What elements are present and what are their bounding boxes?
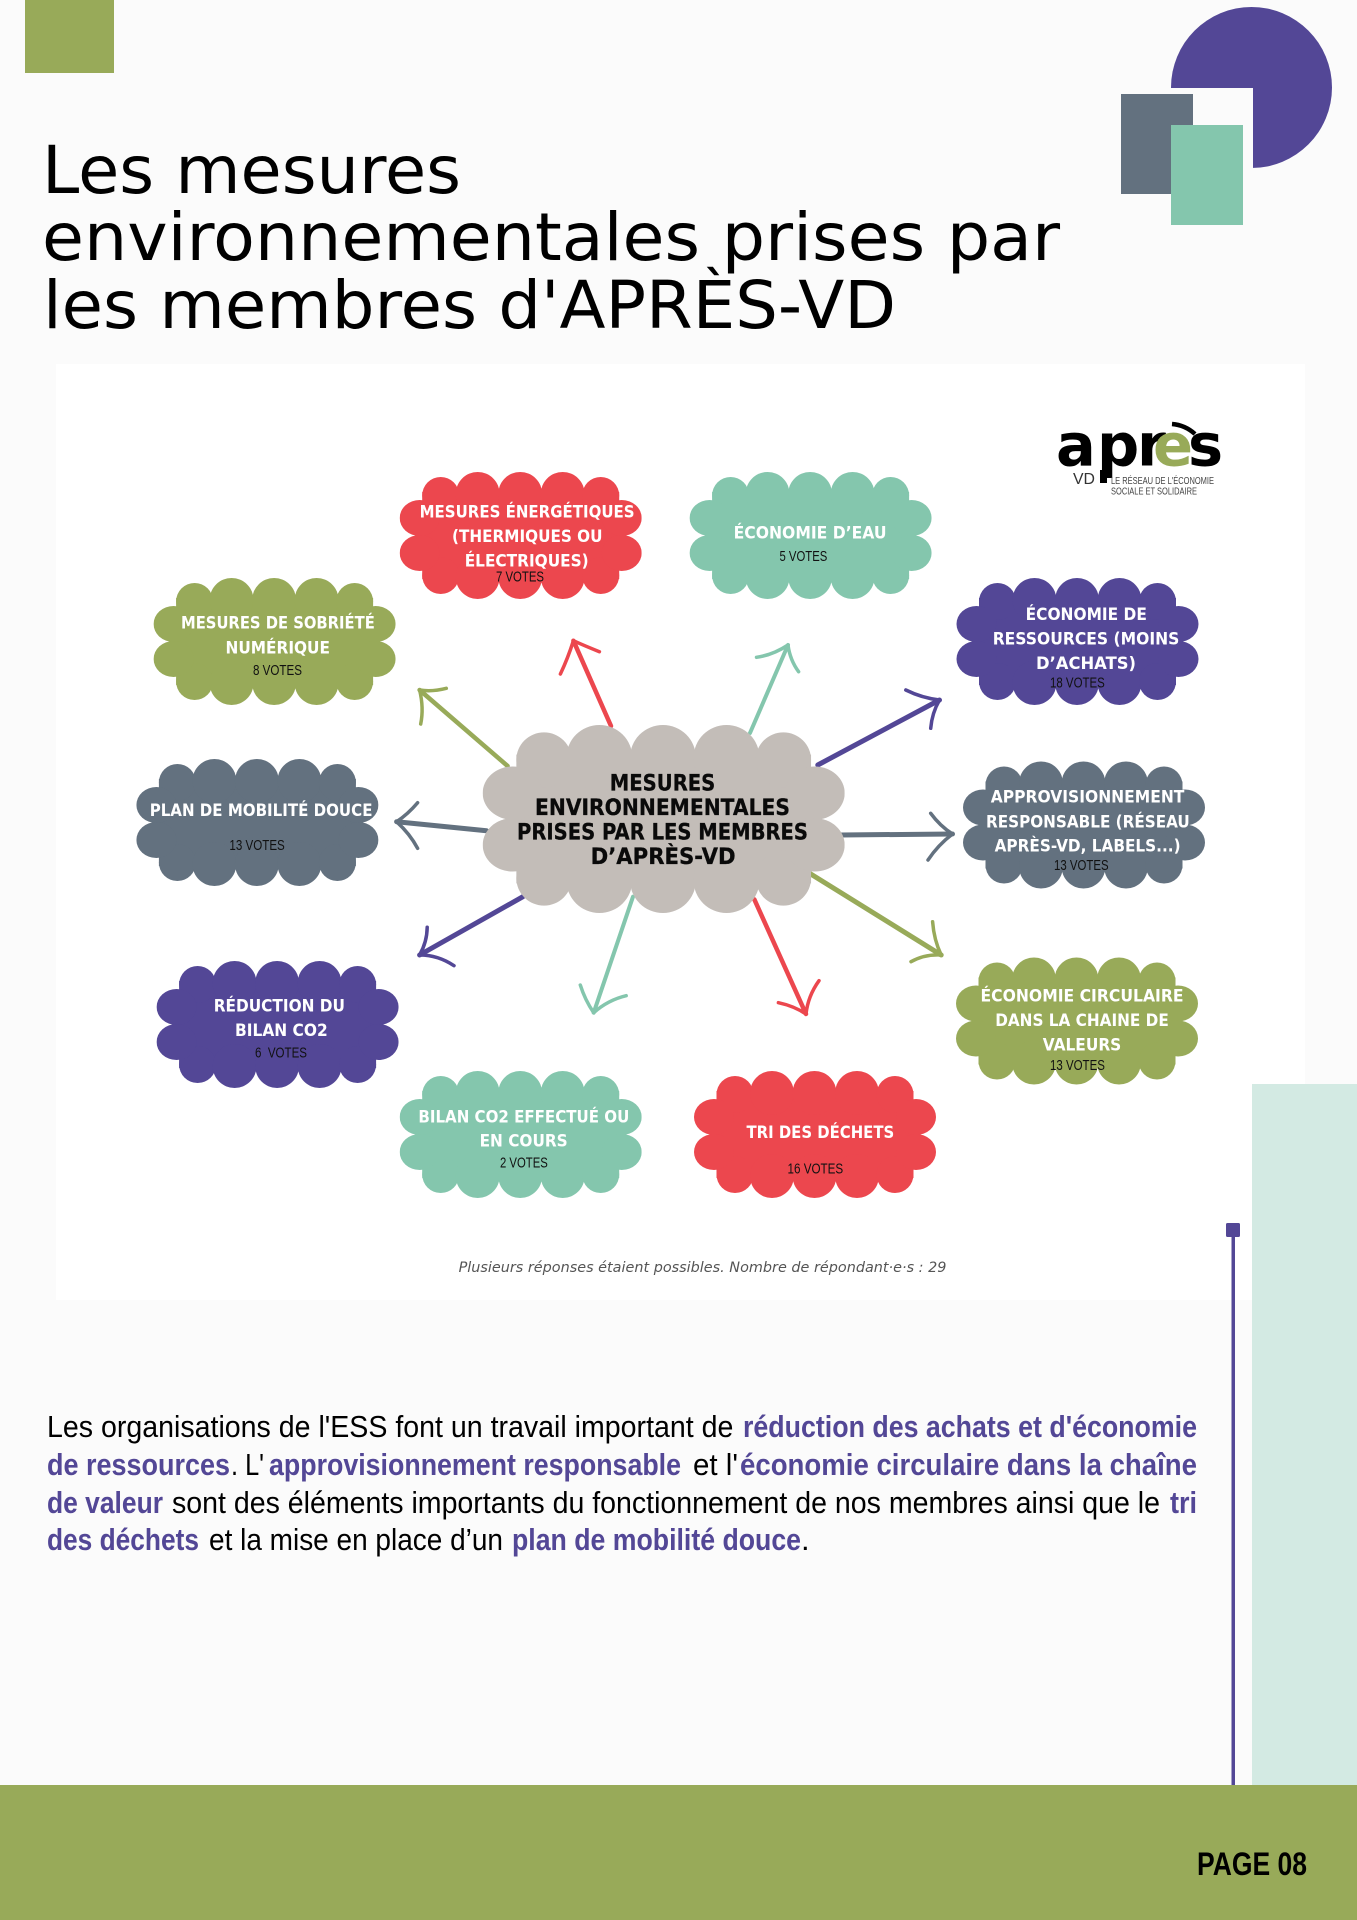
cloud: digital sobriety: MESURES DE SOBRIÉTÉ	[181, 614, 375, 633]
cloud: CO2 assessment: BILAN CO2 EFFECTUÉ OU	[418, 1107, 629, 1126]
cloud: resource saving: 18 VOTES	[1050, 675, 1105, 691]
body text: Les organisations de l'ESS font un travail important de	[47, 1409, 733, 1444]
logo: après-VD: SOCIALE ET SOLIDAIRE	[1111, 487, 1197, 498]
arrow: to soft mobility	[397, 803, 486, 848]
cloud: circular economy: VALEURS	[1043, 1035, 1121, 1054]
purple vertical line with square cap	[1226, 1223, 1240, 1785]
body text: plan de mobilité douce	[512, 1522, 801, 1557]
cloud: CO2 assessment	[400, 1071, 642, 1198]
title: environnementales prises par	[42, 199, 1061, 276]
body text: . L'	[231, 1447, 264, 1482]
central cloud: ENVIRONNEMENTALES	[535, 796, 790, 821]
cloud: responsible sourcing: APRÈS-VD, LABELS...)	[995, 837, 1181, 856]
arrow: to CO2 reduction	[420, 897, 523, 966]
body text: et la mise en place d’un	[209, 1522, 503, 1557]
body text: de ressources	[47, 1447, 230, 1482]
panel: mind map card	[56, 364, 1305, 1300]
cloud: digital sobriety: 8 VOTES	[253, 663, 302, 679]
card background	[56, 364, 1305, 1300]
cloud: digital sobriety	[154, 578, 396, 705]
arrow: to CO2 assessment	[580, 897, 633, 1013]
title	[42, 132, 1061, 344]
cloud: digital sobriety: NUMÉRIQUE	[226, 638, 330, 657]
cloud: resource saving: ÉCONOMIE DE	[1026, 605, 1147, 624]
cloud: energy measures: 7 VOTES	[496, 570, 544, 586]
decorative shapes top right	[1121, 7, 1332, 225]
cloud: CO2 reduction: 6 VOTES	[255, 1046, 307, 1062]
cloud: circular economy	[956, 958, 1198, 1084]
circle cutout	[1165, 88, 1253, 173]
cloud: waste sorting: TRI DES DÉCHETS	[746, 1123, 894, 1142]
cloud: water saving	[690, 472, 932, 599]
cloud: responsible sourcing: 13 VOTES	[1054, 858, 1109, 874]
decorative green square top left	[25, 0, 114, 73]
cloud: responsible sourcing	[963, 762, 1205, 888]
cloud: CO2 assessment: 2 VOTES	[500, 1155, 548, 1171]
page number: PAGE 08	[1197, 1846, 1307, 1882]
body text: de valeur	[47, 1485, 163, 1520]
body text: approvisionnement responsable	[269, 1447, 681, 1482]
central cloud: PRISES PAR LES MEMBRES	[517, 820, 808, 845]
arrow: to responsible sourcing	[841, 813, 952, 860]
cloud: CO2 reduction: BILAN CO2	[235, 1021, 328, 1040]
light green side strip	[1252, 1084, 1357, 1785]
logo: après-VD: VD	[1073, 471, 1095, 488]
slate rectangle	[1121, 94, 1193, 194]
cloud: resource saving: D’ACHATS)	[1036, 654, 1136, 673]
body text: sont des éléments importants du fonctionnement de nos membres ainsi que le	[172, 1485, 1160, 1520]
arrow: to waste sorting	[754, 899, 819, 1014]
body text: .	[801, 1522, 810, 1557]
cloud: water saving: ÉCONOMIE D’EAU	[734, 523, 887, 542]
arrow: to water saving	[750, 645, 799, 733]
body text: des déchets	[47, 1522, 199, 1557]
logo: après-VD: apres	[1056, 410, 1223, 480]
body text: économie circulaire dans la chaîne	[740, 1447, 1197, 1482]
title: Les mesures	[42, 132, 461, 209]
arrow: to digital sobriety	[420, 688, 508, 766]
cloud: CO2 reduction	[157, 961, 399, 1088]
central cloud: D’APRÈS-VD	[591, 844, 736, 870]
cloud: waste sorting	[694, 1071, 936, 1198]
teal rectangle	[1171, 125, 1243, 225]
body text: et l'	[693, 1447, 738, 1482]
cloud: resource saving: RESSOURCES (MOINS	[993, 630, 1179, 649]
arrows	[397, 641, 953, 1014]
central cloud: MESURES	[610, 772, 715, 797]
cloud: responsible sourcing: APPROVISIONNEMENT	[991, 788, 1185, 807]
purple circle	[1171, 7, 1332, 168]
arrow: to resource saving	[818, 690, 940, 765]
cloud: CO2 reduction: RÉDUCTION DU	[214, 997, 345, 1016]
logo: après-VD: LE RÉSEAU DE L'ÉCONOMIE	[1111, 474, 1214, 487]
cloud: circular economy: DANS LA CHAINE DE	[995, 1011, 1169, 1030]
body text: tri	[1170, 1485, 1197, 1520]
title: les membres d'APRÈS-VD	[43, 266, 896, 344]
cloud: energy measures	[400, 472, 642, 599]
cloud: water saving: 5 VOTES	[780, 549, 827, 565]
cloud: circular economy: ÉCONOMIE CIRCULAIRE	[980, 987, 1184, 1006]
caption: Plusieurs réponses étaient possibles. Nombre de répondant·e·s : 29	[459, 1260, 946, 1276]
cloud: soft mobility plan: 13 VOTES	[229, 838, 285, 854]
cloud: waste sorting: 16 VOTES	[788, 1161, 843, 1177]
cloud: CO2 assessment: EN COURS	[480, 1132, 568, 1151]
cloud: resource saving	[956, 578, 1198, 705]
arrow: to circular economy	[809, 873, 941, 962]
cloud: soft mobility plan: PLAN DE MOBILITÉ DOUCE	[150, 801, 372, 820]
cloud: energy measures: ÉLECTRIQUES)	[465, 552, 589, 571]
arrow: to energy measures	[560, 641, 611, 726]
cloud: soft mobility plan	[136, 759, 378, 886]
cloud: energy measures: MESURES ÉNERGÉTIQUES	[420, 503, 635, 522]
body text	[47, 1409, 1197, 1557]
cloud: responsible sourcing: RESPONSABLE (RÉSEAU	[986, 812, 1190, 831]
footer band	[0, 1785, 1357, 1920]
cloud: energy measures: (THERMIQUES OU	[452, 527, 602, 546]
central cloud	[483, 725, 845, 913]
body text: réduction des achats et d'économie	[743, 1409, 1197, 1444]
cloud: circular economy: 13 VOTES	[1050, 1058, 1105, 1074]
